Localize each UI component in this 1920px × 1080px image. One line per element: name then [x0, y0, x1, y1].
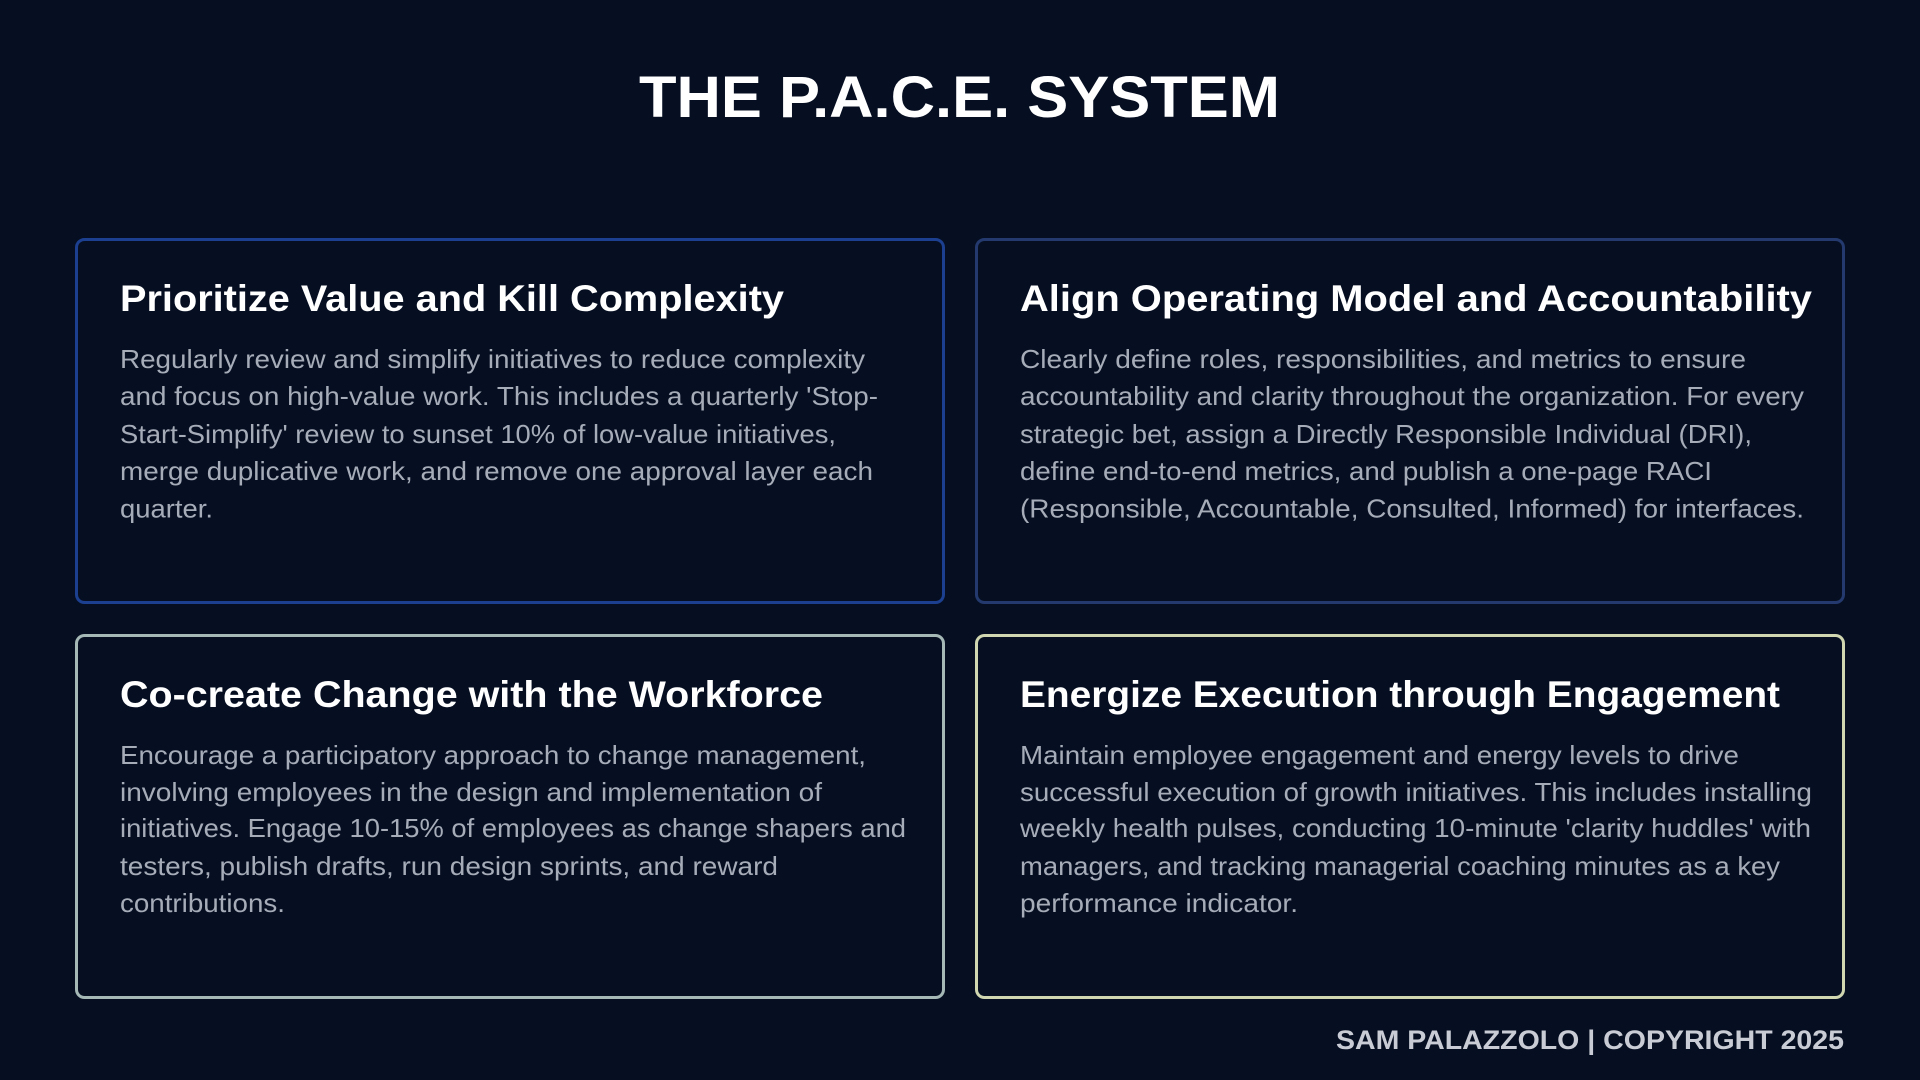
heading: align: Align Operating Model and Accountability	[1020, 278, 1812, 319]
body text: align: strategic bet, assign a Directly Responsible Individual (DRI),	[1020, 419, 1752, 449]
panel: prioritize	[76, 240, 944, 602]
body text: prioritize: Start-Simplify' review to sunset 10% of low-value initiatives,	[120, 419, 836, 449]
panel: co-create	[76, 636, 944, 998]
heading: energize: Energize Execution through Engagement	[1020, 674, 1780, 715]
body text: co-create	[120, 740, 906, 918]
body text: prioritize: and focus on high-value work. This includes a quarterly 'Stop-	[120, 381, 878, 411]
body text: co-create: initiatives. Engage 10-15% of employees as change shapers and	[120, 813, 906, 843]
card frame: align	[976, 240, 1844, 602]
card frame: prioritize	[76, 240, 944, 602]
body text: align: accountability and clarity throughout the organization. For every	[1020, 381, 1804, 411]
body text: prioritize	[120, 344, 878, 524]
footer credit: SAM PALAZZOLO | COPYRIGHT 2025	[1336, 1025, 1844, 1055]
body text: co-create: testers, publish drafts, run design sprints, and reward	[120, 851, 778, 881]
body text: co-create: contributions.	[120, 888, 285, 918]
body text: co-create: involving employees in the design and implementation of	[120, 777, 823, 807]
card frame: energize	[976, 636, 1844, 998]
body text: co-create: Encourage a participatory approach to change management,	[120, 740, 866, 770]
body text: prioritize: merge duplicative work, and remove one approval layer each	[120, 456, 873, 486]
body text: align: Clearly define roles, responsibilities, and metrics to ensure	[1020, 344, 1746, 374]
body text: align: define end-to-end metrics, and publish a one-page RACI	[1020, 456, 1712, 486]
body text: energize: successful execution of growth initiatives. This includes installing	[1020, 777, 1812, 807]
body text: prioritize: quarter.	[120, 494, 213, 524]
body text: energize	[1019, 740, 1812, 918]
body text: align: (Responsible, Accountable, Consulted, Informed) for interfaces.	[1020, 494, 1804, 524]
card frame: co-create	[76, 636, 944, 998]
panel: energize	[976, 636, 1844, 998]
heading: co-create: Co-create Change with the Workforce	[120, 674, 823, 715]
title: THE P.A.C.E. SYSTEM	[639, 65, 1280, 130]
body text: energize: managers, and tracking managerial coaching minutes as a key	[1020, 851, 1780, 881]
body text: energize: performance indicator.	[1020, 888, 1298, 918]
body text: energize: weekly health pulses, conducting 10-minute 'clarity huddles' with	[1019, 813, 1811, 843]
body text: energize: Maintain employee engagement and energy levels to drive	[1020, 740, 1739, 770]
body text: align	[1020, 344, 1804, 524]
panel: align	[976, 240, 1844, 602]
heading: prioritize: Prioritize Value and Kill Complexity	[120, 278, 784, 319]
body text: prioritize: Regularly review and simplify initiatives to reduce complexity	[120, 344, 865, 374]
